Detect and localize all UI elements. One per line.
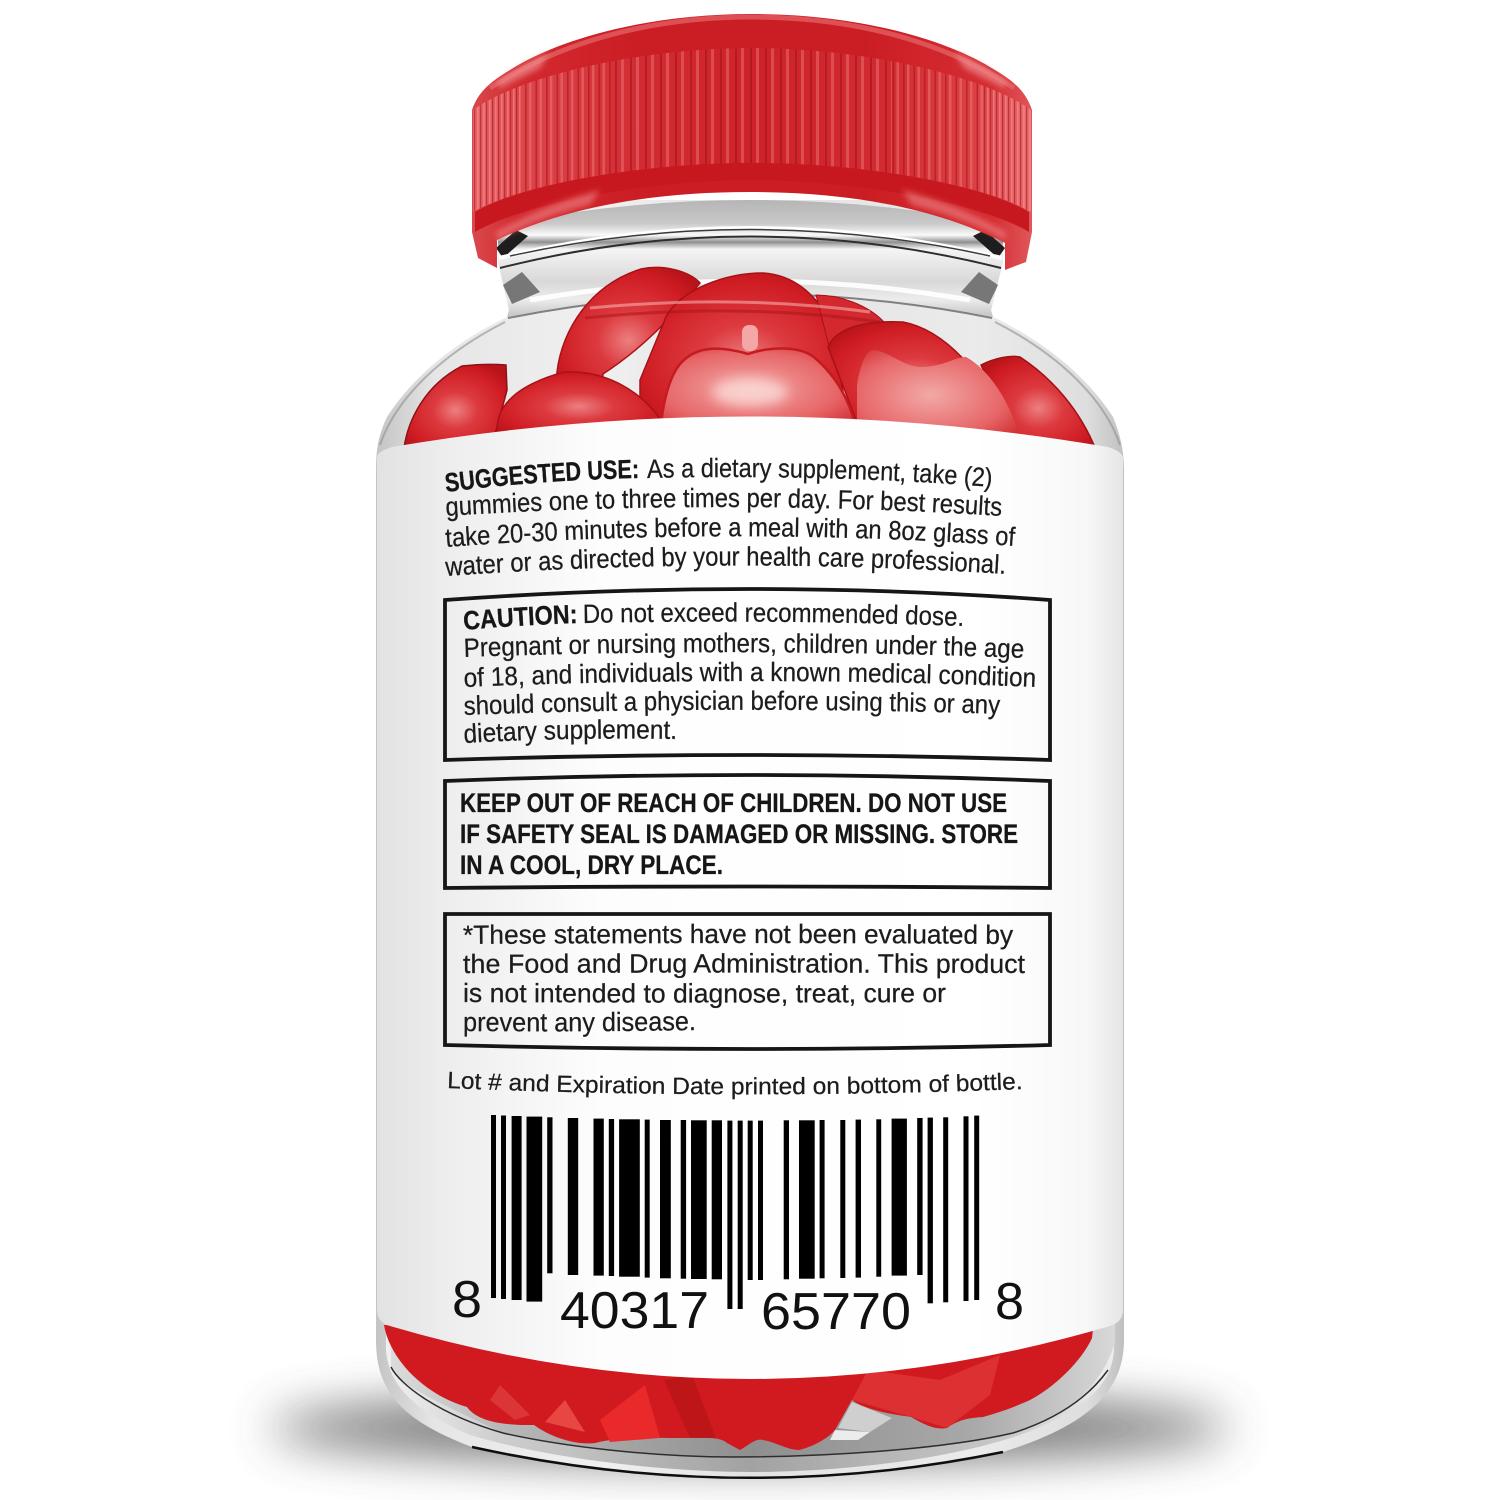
text block: suggested use: [444, 458, 1016, 576]
panel: FDA disclaimer box: [443, 912, 1052, 1051]
panel: FDA disclaimer box: is not intended to diagnose, treat, cure or: [464, 982, 946, 1008]
panel: caution box: dietary supplement.: [464, 719, 675, 746]
text block: suggested use: take 20-30 minutes before a meal with an 8oz glass of: [445, 517, 1016, 548]
white back label: [377, 416, 1123, 1379]
panel: FDA disclaimer box: the Food and Drug Administration. This product: [463, 952, 1025, 978]
panel: keep out of reach warning box: IN A COOL, DRY PLACE.: [461, 855, 722, 878]
barcode: [452, 1115, 1024, 1341]
base of bottle with gummies below the label: [384, 1320, 1115, 1478]
panel: caution box: of 18, and individuals with a known medical condition: [464, 662, 1035, 688]
knurled grip band: [472, 40, 1032, 220]
panel: keep out of reach warning box: IF SAFETY SEAL IS DAMAGED OR MISSING. STORE: [461, 824, 1018, 844]
text: lot number note: Lot # and Expiration Date printed on bottom of bottle.: [448, 1072, 1021, 1100]
barcode: 65770: [761, 1283, 911, 1341]
panel: caution box: should consult a physician before using this or any: [464, 690, 1000, 720]
panel: keep out of reach warning box: [443, 773, 1052, 890]
panel: caution box: [443, 587, 1052, 762]
panel: FDA disclaimer box: *These statements have not been evaluated by: [463, 924, 1014, 950]
panel: product bottle back view: [254, 14, 1246, 1498]
panel: caution box: CAUTION:: [464, 605, 576, 630]
barcode: 40317: [560, 1282, 709, 1340]
barcode: 8: [452, 1271, 482, 1329]
bottle glass body: [376, 200, 1124, 1478]
panel: keep out of reach warning box: KEEP OUT OF REACH OF CHILDREN. DO NOT USE: [461, 793, 1006, 812]
panel: caution box: Pregnant or nursing mothers, children under the age: [465, 632, 1024, 663]
text block: suggested use: water or as directed by your health care professional.: [444, 546, 1004, 576]
neck threads: [496, 200, 1005, 318]
ground shadow: [270, 1394, 1230, 1462]
panel: FDA disclaimer box: prevent any disease.: [464, 1012, 694, 1037]
red gummies above the label: [404, 267, 1096, 450]
text block: suggested use: gummies one to three times per day. For best results: [446, 488, 1002, 522]
red screw cap: [472, 14, 1032, 270]
barcode: 8: [995, 1273, 1024, 1331]
text block: suggested use: As a dietary supplement, take (2): [647, 458, 991, 492]
panel: caution box: Do not exceed recommended dose.: [584, 602, 962, 626]
text block: suggested use: SUGGESTED USE:: [446, 460, 638, 492]
